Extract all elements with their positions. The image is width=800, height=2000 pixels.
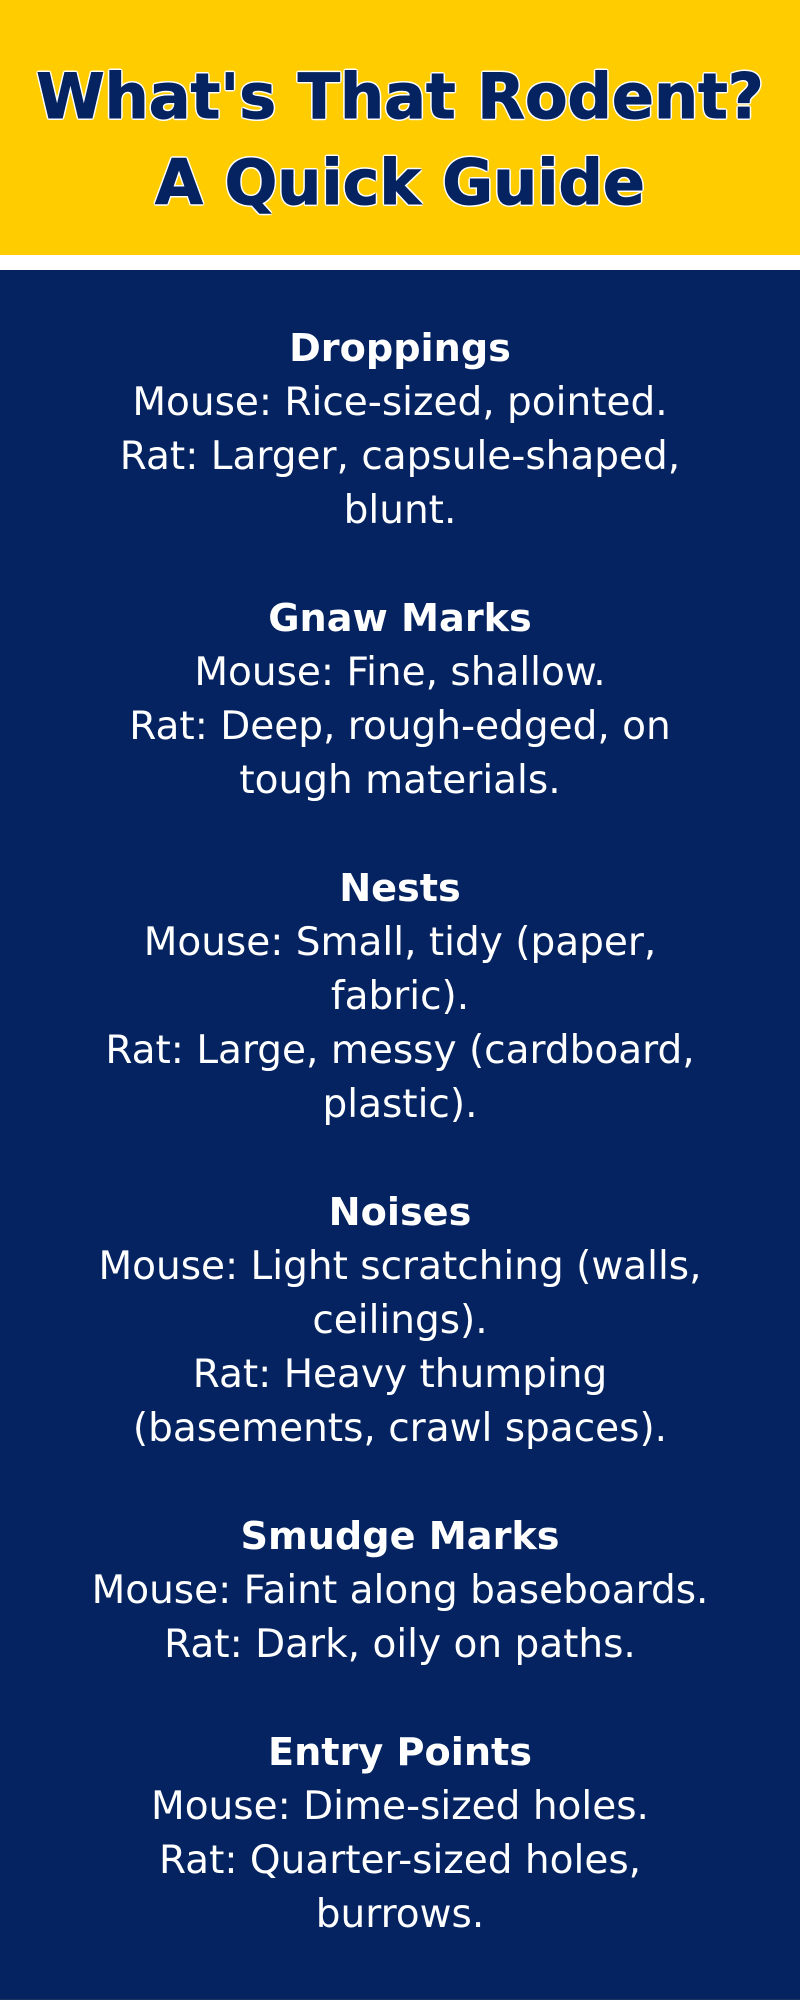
text: entry points comparison xyxy=(151,1784,649,1937)
text: gnaw marks comparison: Rat: Deep, rough-edged, on xyxy=(129,704,671,749)
section: gnaw marks xyxy=(129,597,671,803)
text: gnaw marks comparison xyxy=(129,650,671,803)
text: entry points comparison: Mouse: Dime-sized holes. xyxy=(151,1784,649,1829)
heading: entry points: Entry Points xyxy=(268,1731,532,1775)
text: noises comparison: ceilings). xyxy=(312,1298,488,1343)
section: droppings xyxy=(120,327,680,533)
section: noises xyxy=(98,1191,702,1451)
heading: gnaw marks: Gnaw Marks xyxy=(268,597,532,641)
text: smudge marks comparison: Rat: Dark, oily on paths. xyxy=(164,1622,636,1667)
title: What's That Rodent? xyxy=(36,60,764,133)
heading: noises: Noises xyxy=(329,1191,471,1235)
heading: droppings: Droppings xyxy=(289,327,511,371)
text: nests comparison: Mouse: Small, tidy (paper, xyxy=(144,920,656,965)
header banner xyxy=(0,0,800,255)
text: noises comparison: Rat: Heavy thumping xyxy=(193,1352,607,1397)
text: nests comparison: plastic). xyxy=(322,1082,478,1127)
text: nests comparison xyxy=(105,920,695,1127)
text: gnaw marks comparison: Mouse: Fine, shallow. xyxy=(194,650,606,695)
text: entry points comparison: burrows. xyxy=(316,1892,484,1937)
heading: smudge marks: Smudge Marks xyxy=(240,1515,560,1559)
text: entry points comparison: Rat: Quarter-sized holes, xyxy=(159,1838,641,1883)
text: droppings comparison: Mouse: Rice-sized, pointed. xyxy=(132,380,668,425)
text: smudge marks comparison: Mouse: Faint along baseboards. xyxy=(92,1568,708,1613)
section: nests xyxy=(105,867,695,1127)
text: noises comparison xyxy=(98,1244,702,1451)
section: entry points xyxy=(151,1731,649,1937)
text: smudge marks comparison xyxy=(92,1568,708,1667)
section: smudge marks xyxy=(92,1515,708,1667)
text: droppings comparison: Rat: Larger, capsule-shaped, xyxy=(120,434,680,479)
title: A Quick Guide xyxy=(155,146,645,219)
text: nests comparison: Rat: Large, messy (cardboard, xyxy=(105,1028,695,1073)
heading: nests: Nests xyxy=(339,867,461,911)
title xyxy=(36,60,764,219)
text: droppings comparison xyxy=(120,380,680,533)
text: nests comparison: fabric). xyxy=(331,974,469,1019)
text: noises comparison: (basements, crawl spaces). xyxy=(133,1406,667,1451)
white divider band xyxy=(0,255,800,270)
text: noises comparison: Mouse: Light scratching (walls, xyxy=(98,1244,702,1289)
text: gnaw marks comparison: tough materials. xyxy=(239,758,561,803)
text: droppings comparison: blunt. xyxy=(344,488,456,533)
